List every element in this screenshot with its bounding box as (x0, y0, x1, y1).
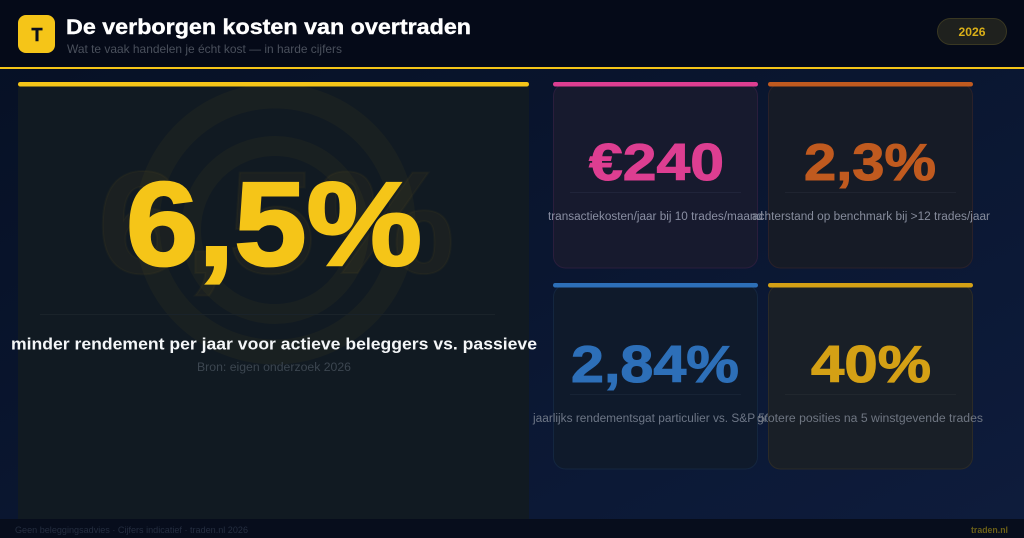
year badge (938, 18, 1006, 44)
label: grotere posities na 5 winstgevende trades (757, 413, 983, 425)
value: 2,84% (571, 336, 739, 394)
panel: larger positions (757, 283, 983, 469)
subtitle: Wat te vaak handelen je écht kost — in harde cijfers (67, 42, 342, 56)
panel: main statistic (11, 82, 537, 520)
accent bar (18, 82, 529, 86)
footer brand: traden.nl (971, 525, 1008, 536)
title: De verborgen kosten van overtraden (66, 15, 471, 39)
value: €240 (589, 134, 724, 192)
icon: logo T: T (32, 25, 42, 45)
footer (0, 519, 1024, 538)
disclaimer: Geen beleggingsadvies · Cijfers indicatief · traden.nl 2026 (15, 525, 248, 536)
panel: return gap (532, 283, 778, 469)
label: transactiekosten/jaar bij 10 trades/maand (548, 211, 763, 223)
value: 2,3% (804, 134, 936, 192)
year badge: 2026 (958, 27, 986, 39)
icon: ghost target rings (147, 96, 403, 352)
panel: transaction costs (548, 82, 763, 268)
caption: minder rendement per jaar voor actieve beleggers vs. passieve (11, 334, 537, 354)
label: achterstand op benchmark bij >12 trades/jaar (752, 211, 990, 223)
label: jaarlijks rendementsgat particulier vs. S&P 500 (532, 413, 778, 425)
value: 40% (811, 336, 931, 394)
icon: logo T (18, 15, 55, 53)
main number: 6,5% (126, 158, 422, 291)
source: Bron: eigen onderzoek 2026 (197, 362, 351, 374)
panel: benchmark lag (752, 82, 990, 268)
ghost number: 6,5% (97, 141, 455, 304)
header (0, 0, 1024, 69)
